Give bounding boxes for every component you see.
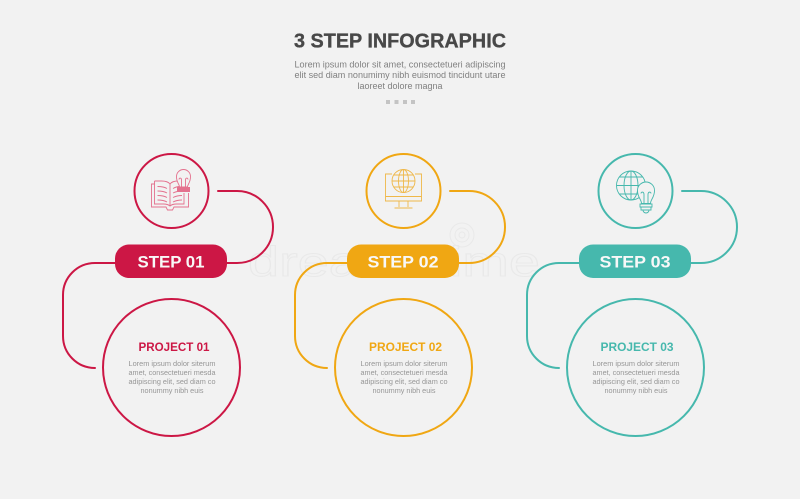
- icon circle: step 2: [366, 154, 440, 228]
- project heading: PROJECT 01: [138, 340, 210, 354]
- icon: open book with light bulb: [152, 170, 190, 210]
- intro text: elit sed diam nonumimy nibh euismod tincidunt utare: [294, 70, 506, 80]
- project circle: [335, 299, 472, 436]
- intro text: Lorem ipsum dolor sit amet, consectetueri adipiscing: [294, 60, 506, 70]
- project text: adipiscing elit, sed diam co: [128, 378, 216, 386]
- project text: amet, consectetueri mesda: [128, 369, 216, 377]
- pagination dots: [386, 100, 415, 104]
- step pill: STEP 02: [368, 252, 438, 272]
- connector: icon to step pill: [682, 191, 737, 263]
- step pill: [579, 244, 691, 278]
- step 1 column: [63, 154, 273, 436]
- intro text: laoreet dolore magna: [358, 81, 443, 91]
- icon circle: step 1: [134, 154, 208, 228]
- step pill: [115, 244, 227, 278]
- connector: icon to step pill: [218, 191, 273, 263]
- step pill: [347, 244, 459, 278]
- project text: adipiscing elit, sed diam co: [592, 378, 680, 386]
- intro text: [294, 60, 506, 91]
- connector: step pill to project circle: [527, 263, 579, 368]
- icon: bulb base: [177, 187, 190, 192]
- watermark: dreamstime: [248, 238, 540, 285]
- project text: Lorem ipsum dolor siterum: [128, 360, 216, 368]
- step 3 column: [527, 154, 737, 436]
- step pill: STEP 01: [138, 252, 204, 272]
- project text: amet, consectetueri mesda: [360, 369, 448, 377]
- icon circle: step 3: [598, 154, 672, 228]
- step pill: STEP 03: [600, 252, 670, 272]
- connector: step pill to project circle: [63, 263, 115, 368]
- icon: globe with light bulb: [616, 171, 654, 213]
- project text: amet, consectetueri mesda: [592, 369, 680, 377]
- project heading: PROJECT 02: [369, 340, 442, 354]
- project circle: [103, 299, 240, 436]
- project text: Lorem ipsum dolor siterum: [592, 360, 680, 368]
- project heading: PROJECT 03: [600, 340, 674, 354]
- watermark: [248, 223, 540, 285]
- project text: Lorem ipsum dolor siterum: [360, 360, 448, 368]
- connector: step pill to project circle: [295, 263, 347, 368]
- icon: globe on monitor: [386, 170, 422, 208]
- project circle: [567, 299, 704, 436]
- project text: nonummy nibh euis: [372, 387, 436, 395]
- project text: adipiscing elit, sed diam co: [360, 378, 448, 386]
- project text: [592, 360, 680, 395]
- project text: [128, 360, 216, 395]
- connector: icon to step pill: [450, 191, 505, 263]
- project text: [360, 360, 448, 395]
- project text: nonummy nibh euis: [140, 387, 204, 395]
- project text: nonummy nibh euis: [604, 387, 668, 395]
- step 2 column: [295, 154, 505, 436]
- title: 3 STEP INFOGRAPHIC: [294, 30, 506, 52]
